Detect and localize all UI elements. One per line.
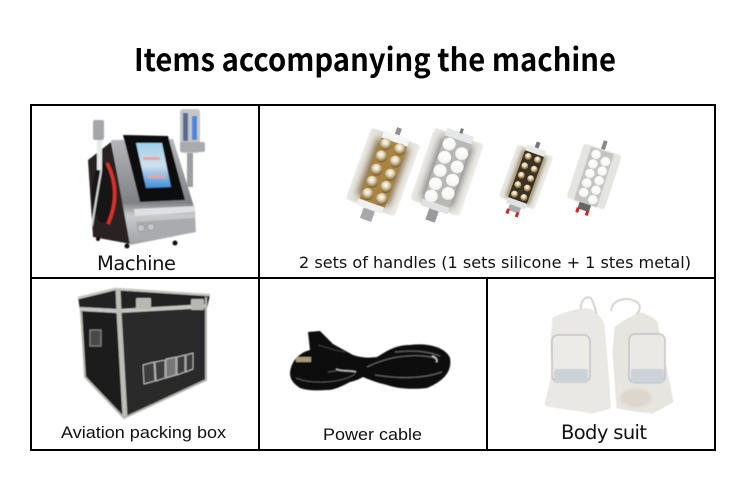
icon: metal handle large	[341, 119, 424, 229]
label: handles: 2 sets of handles (1 sets silicone + 1 stes metal)	[299, 253, 691, 272]
panel: machine	[31, 105, 259, 278]
icon: machine	[88, 109, 205, 248]
title: Items accompanying the machine	[134, 35, 616, 80]
label: body suit: Body suit	[561, 421, 647, 444]
icon: flight case	[78, 288, 210, 418]
icon: body suit bags	[545, 297, 673, 413]
icon: silicone handle large	[405, 120, 487, 230]
label: aviation packing box: Aviation packing box	[61, 423, 227, 442]
icon: metal handle small	[494, 136, 557, 222]
panel: body suit	[487, 278, 715, 450]
panel: aviation packing box	[31, 278, 259, 450]
panel: power cable	[259, 278, 487, 450]
label: machine: Machine	[97, 252, 176, 275]
icon: silicone handle small	[563, 135, 625, 220]
label: power cable: Power cable	[323, 425, 422, 444]
panel: handles	[259, 105, 715, 278]
icon: power cable	[290, 331, 450, 390]
